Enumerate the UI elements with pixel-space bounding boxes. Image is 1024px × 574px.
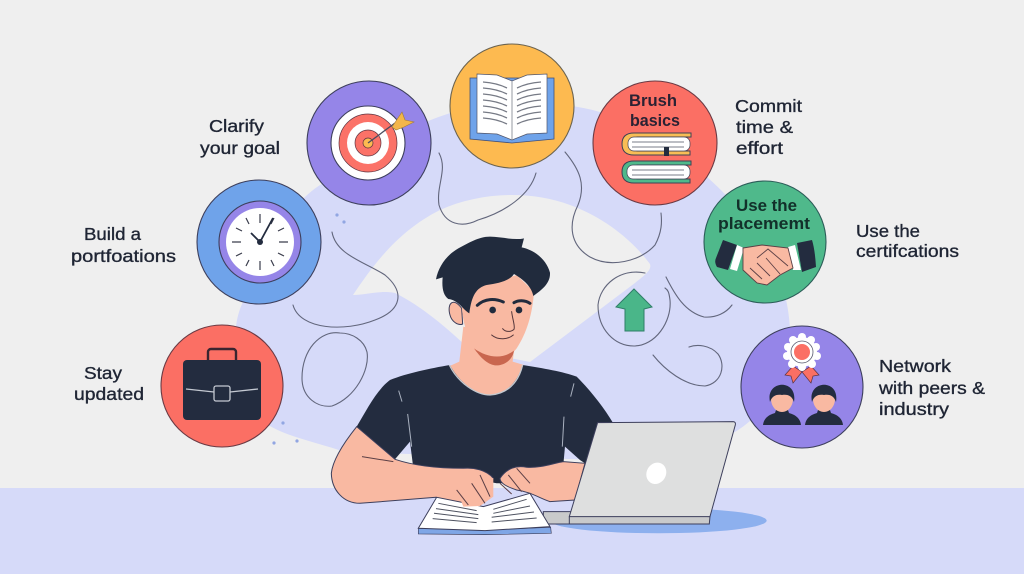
label: commit time and effort: time & [736,117,793,137]
label: network with peers and industry: with peers & [878,378,985,398]
label: build a portfoations: portfoations [71,246,176,266]
icon: target [307,81,431,205]
book pages [418,493,550,531]
badge text: Brush [629,91,677,110]
hair [436,237,550,313]
icon: brush basics books [593,81,717,205]
icon: brush basics books: basics [630,111,680,130]
label: stay updated [74,363,144,404]
icon: briefcase [161,325,283,447]
book text lines [433,499,537,523]
label: stay updated: Stay [84,363,122,383]
label: network with peers and industry [878,356,985,419]
laptop logo [642,459,670,488]
desk surface [0,488,1024,574]
neck shadow [474,348,514,365]
open book on desk [418,493,551,535]
icon: award and peers [741,326,863,448]
t-shirt [357,365,613,483]
shirt seams [399,383,574,447]
label: network with peers and industry: industry [879,399,949,419]
label: clarify your goal: your goal [200,138,280,158]
label: clarify your goal: Clarify [209,116,264,136]
hand over book [457,473,493,507]
eyebrows [477,300,530,305]
label: network with peers and industry: Network [879,356,951,376]
left arm [331,427,493,507]
label: stay updated: updated [74,384,144,404]
book cover edge [418,527,551,535]
laptop hinge line [568,517,571,524]
label: commit time and effort: Commit [735,96,802,116]
label: use the certifications [856,221,959,261]
person working at laptop [331,237,767,535]
lavender background blob [235,104,790,460]
label: clarify your goal [200,116,280,158]
label: build a portfoations: Build a [84,224,141,244]
laptop shadow [550,508,767,533]
growth arrow icon [616,289,652,331]
light inner arch [353,195,650,362]
nose and smile [492,312,514,339]
decorative dots left [272,213,346,445]
eyes [489,307,496,313]
badge text: Use the [736,196,797,215]
right arm [500,462,585,502]
flowing connector lines [293,152,732,406]
neck [448,327,524,396]
left hand finger lines [457,475,490,505]
laptop base [543,512,710,524]
icon: clock [197,180,321,304]
label: build a portfoations [71,224,176,266]
icon: open book [450,44,574,168]
label: commit time and effort: effort [736,138,783,158]
shirt collar [449,365,523,395]
label: use the certifications: Use the [856,221,920,241]
label: commit time and effort [735,96,802,158]
icon: handshake: placememt [718,214,810,233]
face [462,275,534,359]
finger lines [362,457,530,494]
label: use the certifications: certifcations [856,241,959,261]
icon: handshake [704,181,826,303]
ear [449,302,463,324]
laptop lid [569,422,735,517]
